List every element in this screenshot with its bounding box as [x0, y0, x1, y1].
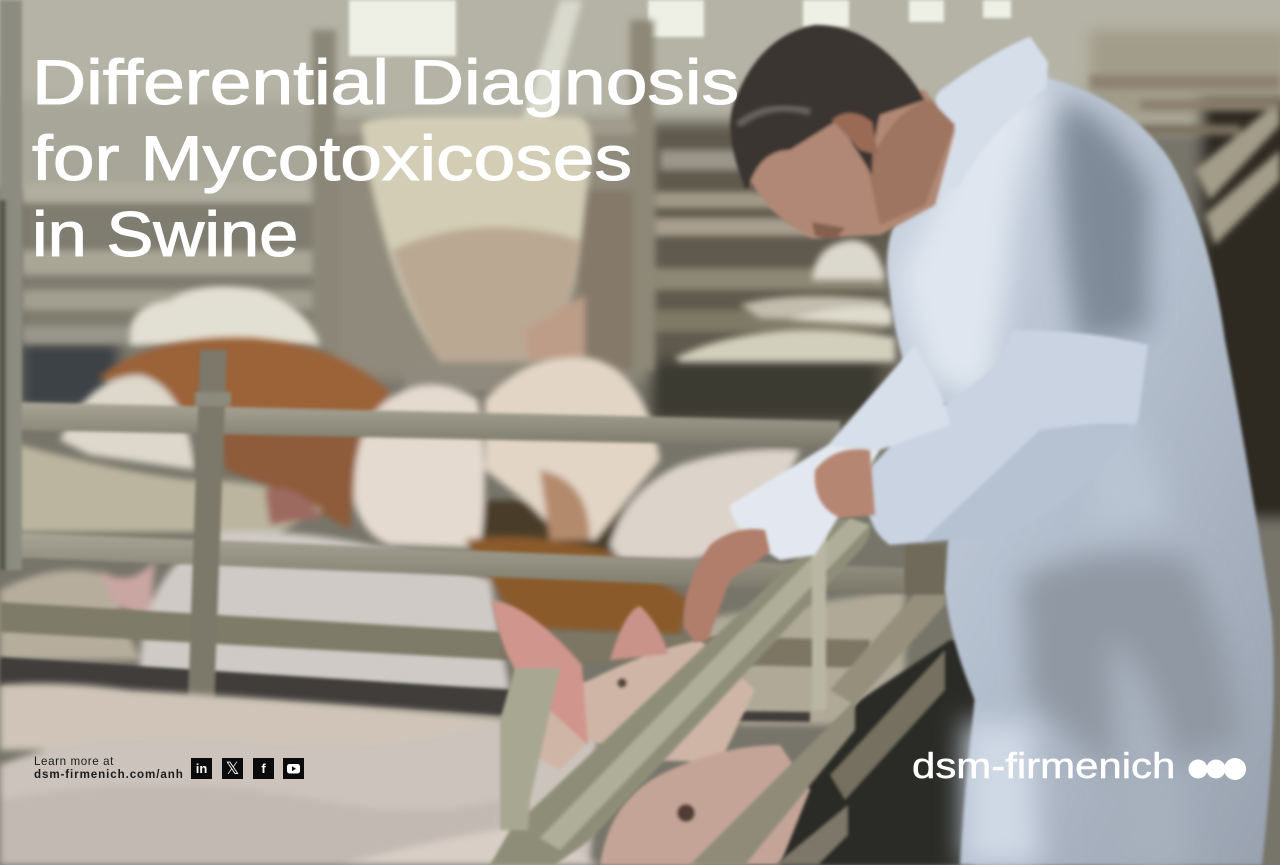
- title: [32, 48, 739, 270]
- title: for Mycotoxicoses: [32, 124, 632, 194]
- coat body: [887, 38, 1274, 865]
- logo: dsm-firmenich: [912, 745, 1246, 786]
- head: [730, 25, 955, 240]
- icon: Facebook: f: [261, 761, 266, 776]
- dark floor under front pen: [700, 640, 975, 865]
- hood: [936, 37, 1048, 195]
- background pen rails: [22, 0, 1280, 370]
- pen rails, front horizontal: [0, 0, 905, 722]
- feeder hopper: [362, 116, 592, 392]
- text: learn more link: Learn more at: [34, 755, 114, 768]
- icon: YouTube: [283, 758, 304, 779]
- icon: X: [222, 758, 243, 779]
- sleeves: [730, 330, 1148, 560]
- title: in Swine: [32, 200, 298, 270]
- windows: [349, 0, 1011, 56]
- background white pig bodies on shelves: [130, 240, 895, 362]
- coat shading: [900, 90, 1240, 865]
- hands: [684, 449, 875, 642]
- text: learn more link: [34, 755, 184, 781]
- text: learn more link: dsm-firmenich.com/anh: [34, 768, 184, 781]
- front angled rails and posts: [490, 518, 945, 865]
- pigs behind the front rail: [0, 338, 905, 725]
- foreground pig head with ears: [492, 600, 810, 865]
- bottom pale pigs: [0, 683, 600, 865]
- title: Differential Diagnosis: [32, 48, 739, 118]
- icon: X: 𝕏: [226, 759, 239, 778]
- logo wordmark: dsm-firmenich: [912, 745, 1175, 786]
- logo mark: three dots: [1188, 758, 1246, 780]
- icon: LinkedIn: [191, 758, 212, 779]
- icon: Facebook: [253, 758, 274, 779]
- hair: [730, 25, 925, 188]
- icon: LinkedIn: in: [196, 761, 207, 776]
- man in white protective coat: [684, 25, 1274, 865]
